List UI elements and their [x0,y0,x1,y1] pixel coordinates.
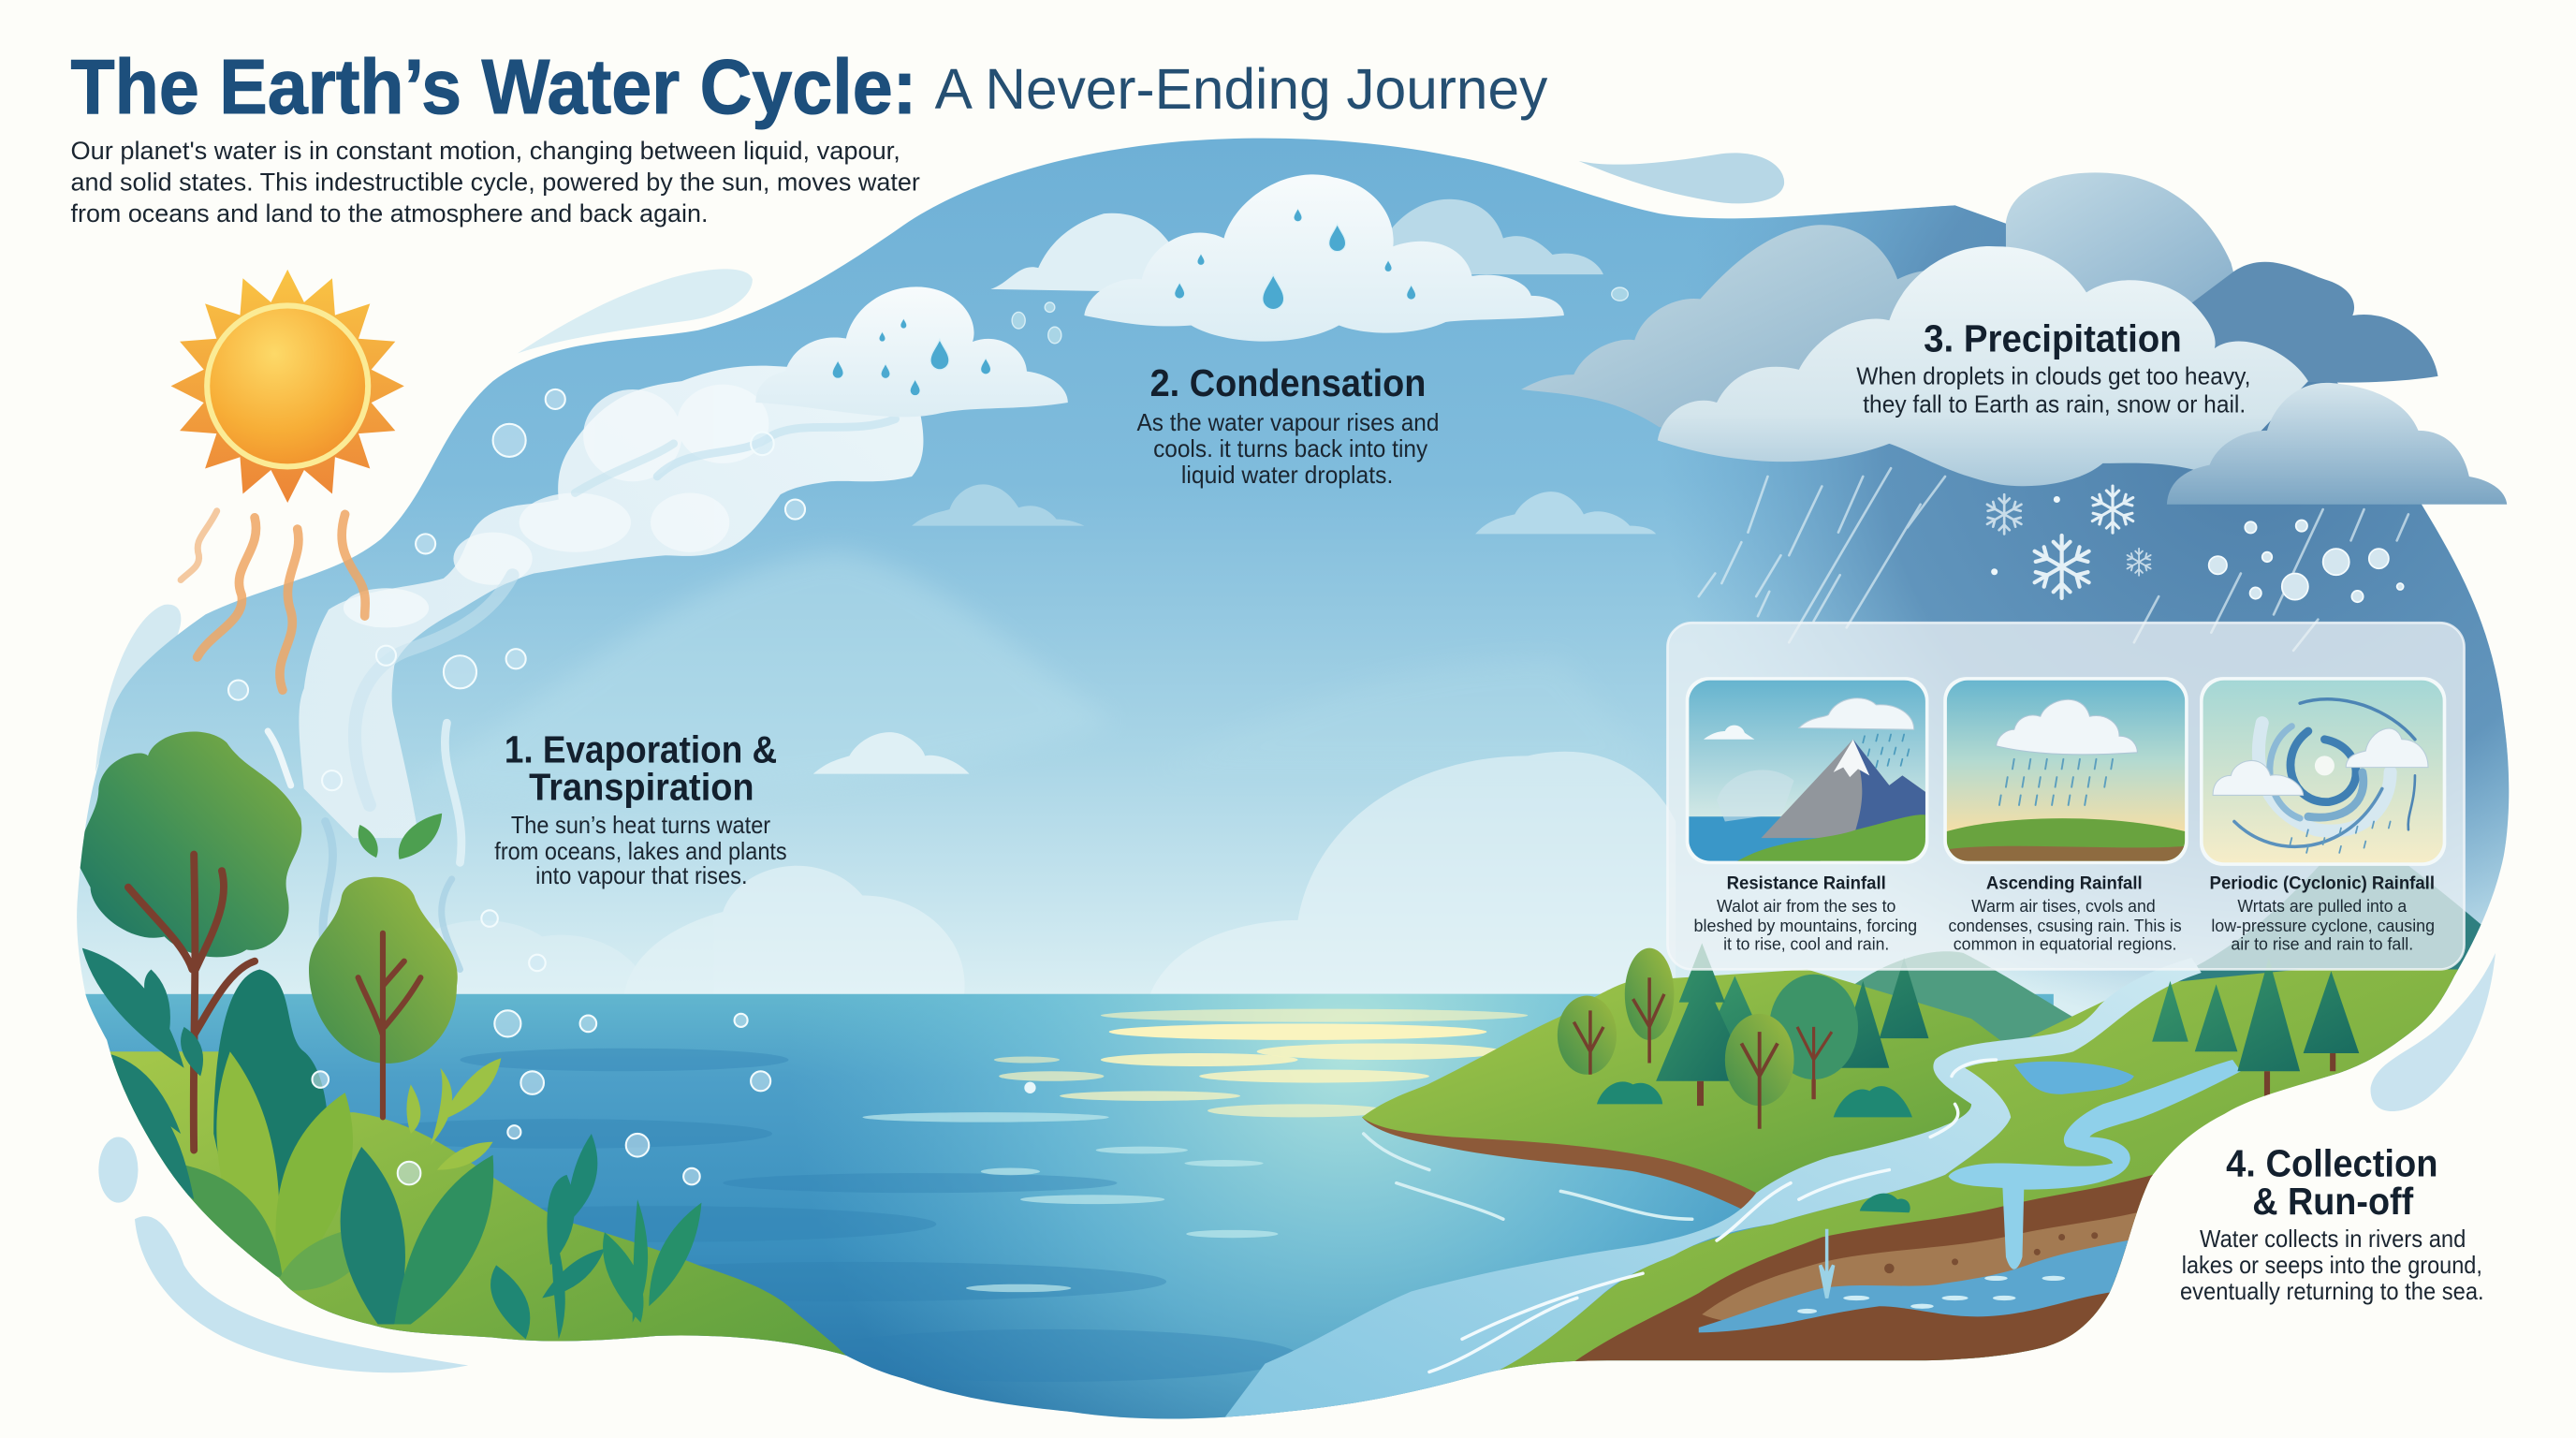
label: resistance rainfall: Resistance Rainfall [1727,873,1886,893]
label: resistance rainfall [1693,873,1917,953]
swoosh: top right wisp [1579,153,1784,203]
step 1: evaporation text: The sun’s heat turns water [511,813,771,839]
small drops near clouds [1012,287,1628,344]
distant pale sky hills [518,549,1080,741]
title [71,44,1548,130]
swoosh: right droplet [2370,953,2496,1111]
foreground leaves [74,948,701,1339]
snowflakes [1987,486,2151,598]
forest on peninsula [1558,943,1928,1129]
intro text: Our planet's water is in constant motion, changing between liquid, vapour, [71,136,900,165]
vapour lobes [344,385,768,627]
swoosh: lower left droplet and splash [98,1137,468,1372]
sun glare on water [994,1009,1528,1117]
hailstones [2209,520,2404,602]
label: ascending rainfall: Ascending Rainfall [1986,873,2143,893]
water vapour stream [268,366,923,969]
pale wave highlights [862,1112,1278,1292]
step 3: precipitation text: When droplets in clouds get too heavy, [1856,364,2250,390]
land: distant hills [1808,825,2530,1101]
bushes [1597,1081,1912,1117]
swoosh: left wisp [95,605,181,772]
tree a [1558,996,1617,1075]
sky [0,98,2576,1019]
title: The Earth’s Water Cycle: [71,44,916,130]
tree b [1625,948,1674,1040]
step 4: collection text: lakes or seeps into the ground, [2182,1253,2482,1279]
step 1: evaporation text [494,727,787,889]
step 2: condensation text: As the water vapour rises and [1137,410,1439,436]
sun rays [171,270,404,503]
intro text [71,136,920,227]
step 2: condensation text [1137,361,1439,489]
green bush by river [1860,1194,1910,1212]
storm cloud: left grey [1521,225,1971,427]
small sky cloud right [1475,492,1656,534]
droplets on main cloud [1175,209,1415,310]
land: soil layers [1560,1170,2169,1372]
card: resistance rainfall illustration [1686,677,1928,864]
tree e [1812,986,1815,1099]
heat waves [181,511,365,690]
forest on right slope [2152,958,2359,1101]
label: ascending rainfall: Warm air tises, cvols and [1971,896,2156,916]
seepage arrow [1821,1229,1834,1298]
step 2: condensation text: 2. Condensation [1150,361,1426,404]
dark bushes behind plants [213,969,329,1208]
step 4: collection text: 4. Collection [2226,1142,2438,1185]
lake [2014,1062,2134,1094]
pine c [1656,943,1751,1081]
cloud: condensation back left [990,213,1183,292]
tree d [1725,1014,1794,1106]
dark storm sky [1726,205,2509,998]
droplets on small cloud [832,318,990,396]
label: ascending rainfall [1949,873,2182,953]
cloud: condensation main [1084,174,1564,342]
label: periodic rainfall: Periodic (Cyclonic) Rainfall [2210,873,2435,893]
step 2: condensation text: liquid water droplats. [1181,462,1393,489]
step 3: precipitation text: they fall to Earth as rain, snow or hail. [1863,392,2246,418]
label: periodic rainfall: Wrtats are pulled into a [2237,896,2408,916]
small sky cloud near condensation [912,484,1084,526]
horizon clouds [378,752,1676,994]
step 4: collection text: eventually returning to the sea. [2180,1279,2484,1305]
step 3: precipitation text: 3. Precipitation [1924,317,2182,360]
cloud: condensation back right [1380,199,1603,274]
sun [171,270,404,503]
storm cloud: front pale [1658,246,2308,486]
main river [1216,958,2202,1430]
step 3: precipitation text [1856,317,2250,418]
step 1: evaporation text: 1. Evaporation & [505,727,777,770]
step 2: condensation text: cools. it turns back into tiny [1153,436,1427,462]
cloud: vapour-fed small cloud [755,286,1068,417]
storm cloud: right dark [2136,262,2438,383]
card: ascending rainfall illustration [1943,677,2188,864]
step 1: evaporation text: Transpiration [529,766,754,809]
step 1: evaporation text: from oceans, lakes and plants [494,839,787,865]
sun body [207,305,368,466]
rain streaks [1699,468,2408,651]
ocean [0,994,2054,1438]
shoreline ripples [1364,1134,1692,1219]
label: ascending rainfall: condenses, csusing rain. This is [1949,916,2182,935]
step 4: collection text [2180,1142,2484,1305]
floating leaves [359,814,442,859]
intro text: from oceans and land to the atmosphere and back again. [71,198,708,227]
storm cloud group [1521,172,2507,505]
bubbles [228,389,1036,1184]
groundwater [1699,1238,2144,1332]
swoosh: upper left wisp [518,269,753,353]
rainfall types panel [1667,623,2465,969]
label: resistance rainfall: bleshed by mountains, forcing [1693,916,1917,935]
label: resistance rainfall: it to rise, cool and rain. [1723,933,1889,953]
left island hill [82,1051,846,1364]
label: periodic rainfall: low-pressure cyclone, causing [2211,916,2435,935]
step 4: collection text: Water collects in rivers and [2200,1226,2466,1253]
label: periodic rainfall: air to rise and rain to fall. [2231,933,2413,953]
step 4: collection text: & Run-off [2252,1180,2414,1223]
intro text: and solid states. This indestructible cycle, powered by the sun, moves water [71,168,920,197]
card: cyclonic rainfall illustration [2200,677,2446,866]
ocean dark wave patches [345,1049,1298,1382]
land: peninsula [1362,969,2037,1219]
small pale cloud [813,732,970,774]
storm cloud: back top [2006,172,2244,312]
ocean light glow [874,994,1762,1419]
land: right green slope [1471,969,2530,1384]
tributary river and pools [1821,1060,2241,1298]
title: A Never-Ending Journey [935,57,1548,122]
label: resistance rainfall: Walot air from the ses to [1717,896,1895,916]
storm cloud: right front [2167,383,2507,505]
tree 2 [309,877,458,1117]
pine: back [1708,958,1928,1068]
label: ascending rainfall: common in equatorial regions. [1954,933,2176,953]
tree 1 [78,732,301,1151]
step 1: evaporation text: into vapour that rises. [535,863,748,889]
label: periodic rainfall [2210,873,2435,953]
